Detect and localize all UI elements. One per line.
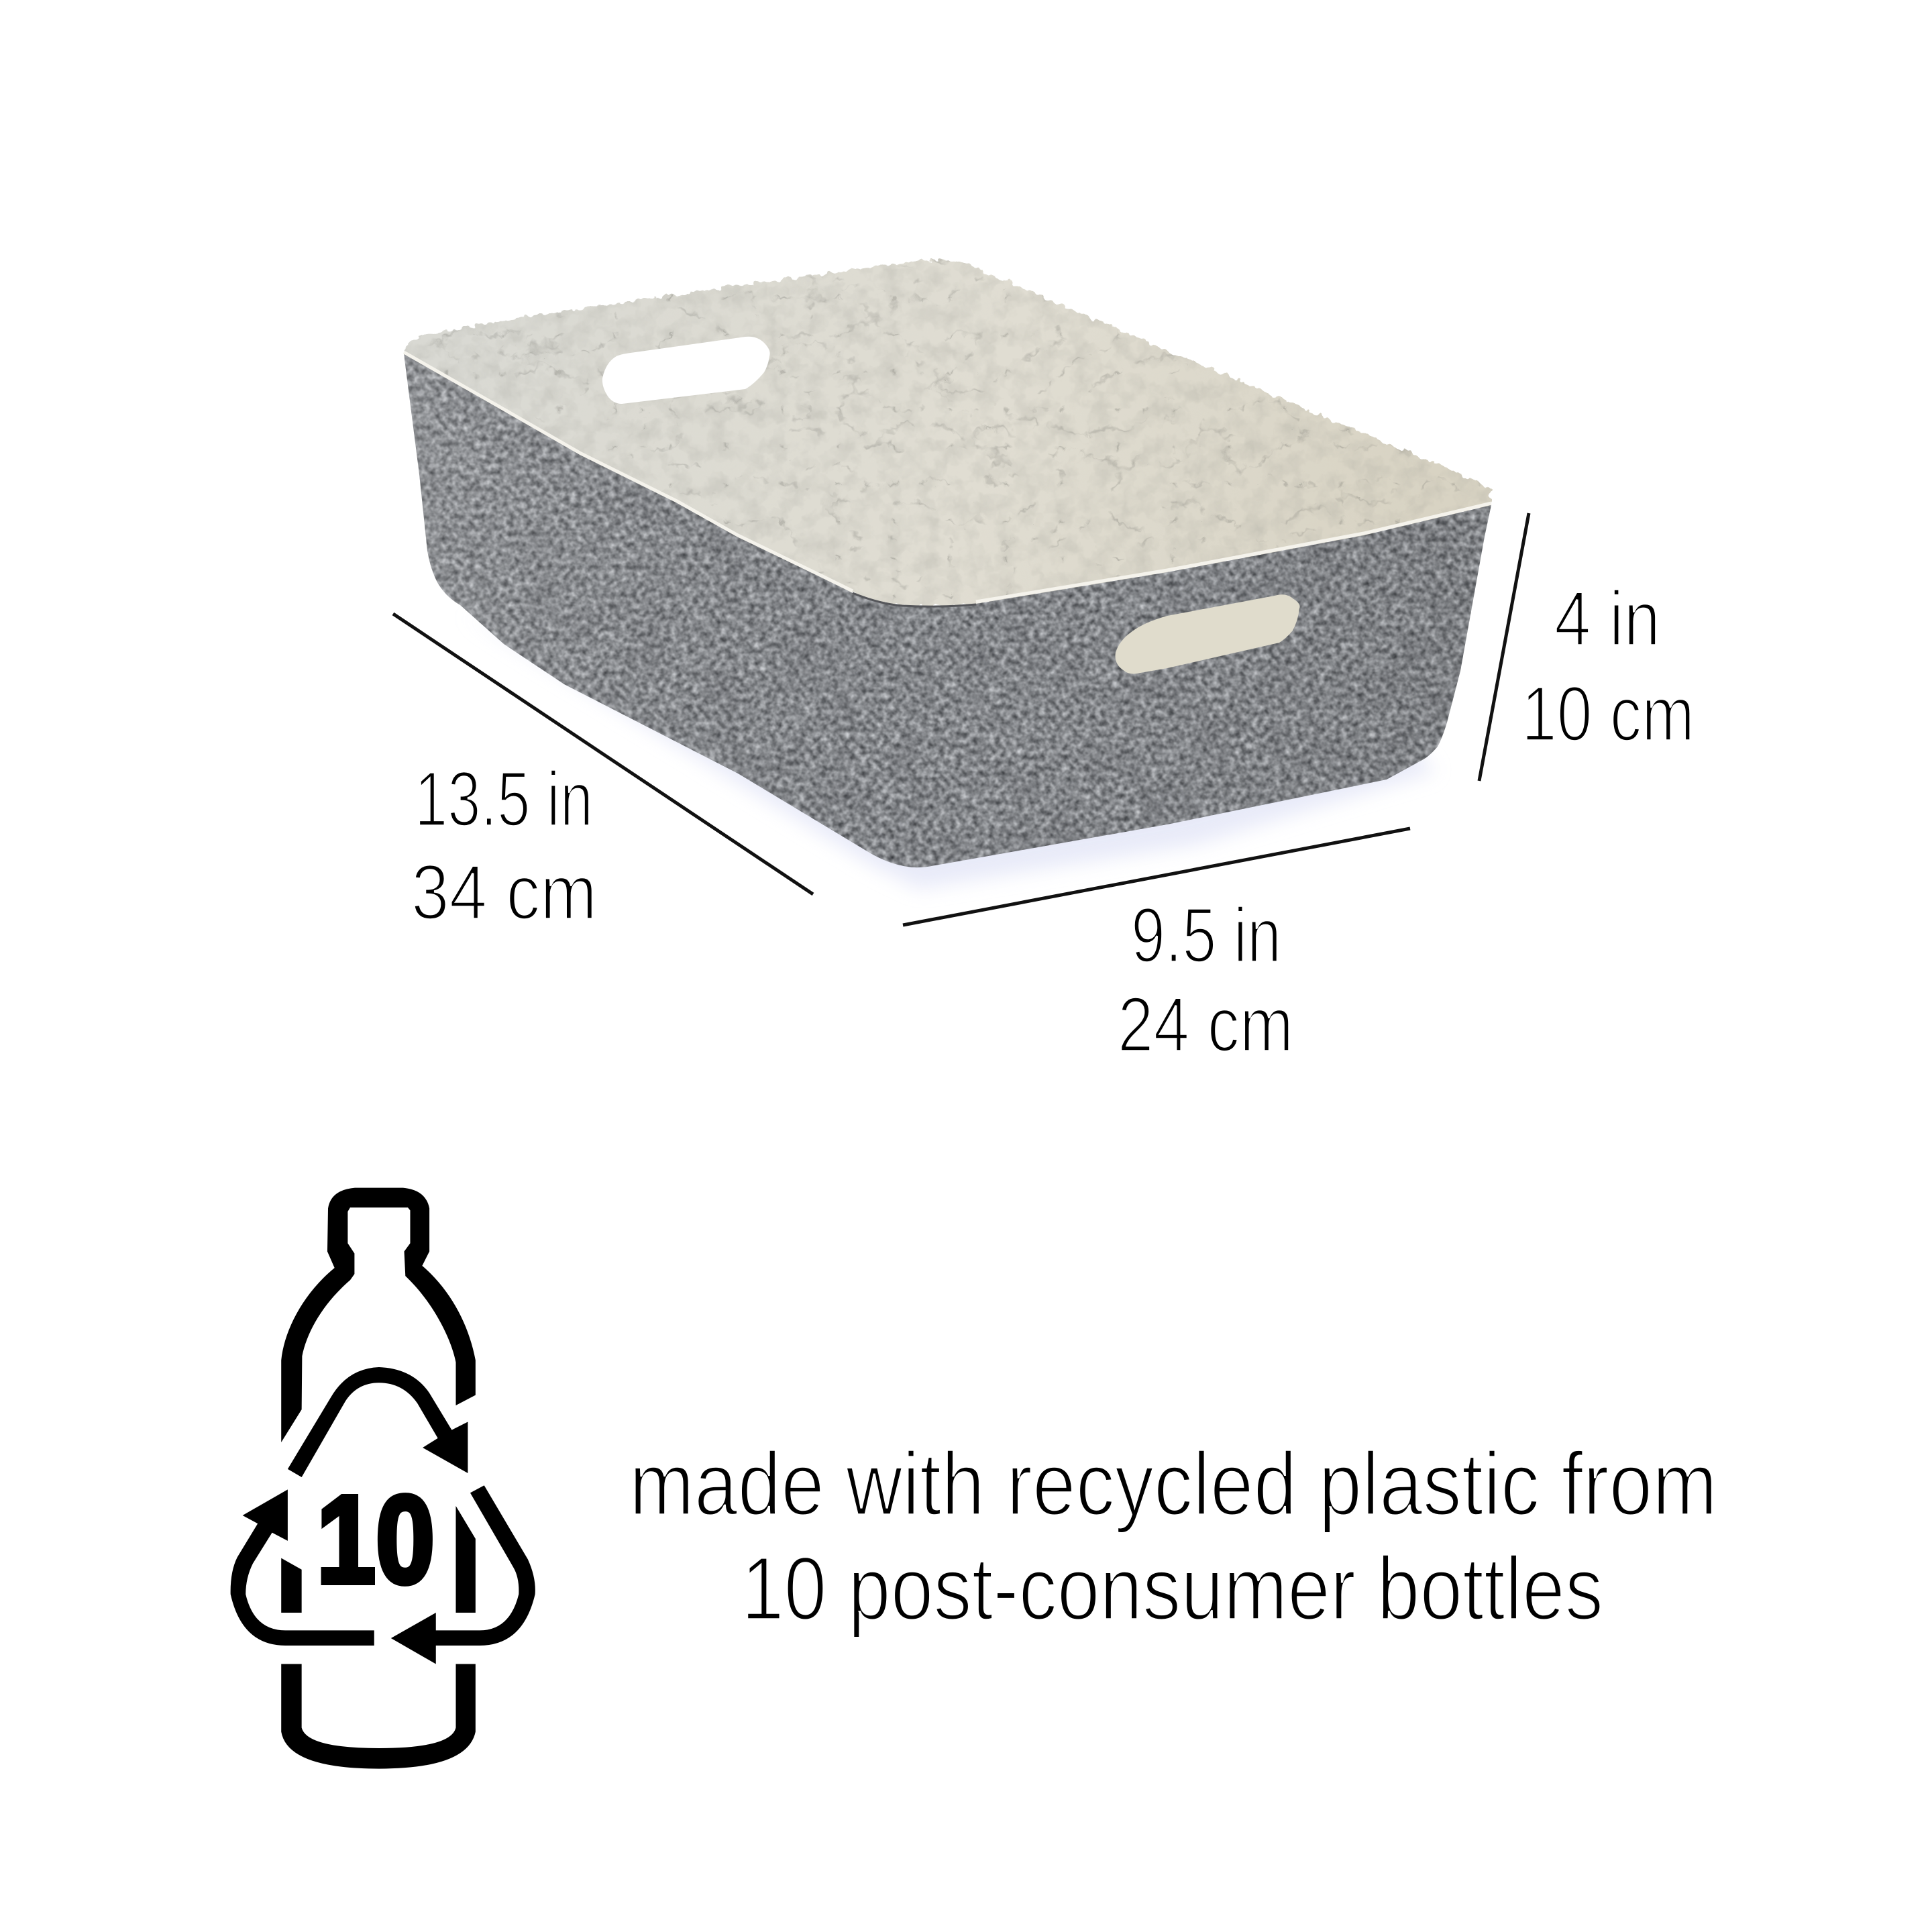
dimension line: length xyxy=(393,614,813,894)
recycled plastic statement xyxy=(629,1434,1717,1639)
recycled plastic statement: 10 post-consumer bottles xyxy=(741,1539,1603,1639)
bottle side fragment: right xyxy=(455,1506,476,1613)
infographic canvas xyxy=(231,258,1711,1769)
length label xyxy=(411,755,597,936)
icon: recycled bottle xyxy=(231,1188,535,1769)
front handle cutout xyxy=(1116,594,1300,674)
width label xyxy=(1118,892,1293,1068)
height label: 10 cm xyxy=(1521,670,1695,757)
bottle count number: 10 xyxy=(317,1470,435,1609)
basket exterior: grey felt xyxy=(396,349,1509,879)
bottle upper outline xyxy=(281,1188,476,1442)
basket photo xyxy=(396,255,1509,889)
basket rim edge xyxy=(404,352,853,591)
recycled plastic statement: made with recycled plastic from xyxy=(629,1434,1717,1534)
recycling arrow: right xyxy=(391,1485,535,1664)
basket interior: cream felt xyxy=(396,255,1509,617)
height label: 4 in xyxy=(1554,575,1660,662)
recycling arrow: left xyxy=(231,1489,374,1646)
bottle side fragment: left xyxy=(281,1558,302,1613)
length label: 34 cm xyxy=(411,849,597,936)
height label xyxy=(1521,575,1695,757)
dimension line: height xyxy=(1479,513,1529,781)
basket floor shadow xyxy=(463,614,1436,889)
basket rim right edge xyxy=(976,503,1491,602)
basket rim shaded corner xyxy=(853,593,976,606)
length label: 13.5 in xyxy=(415,755,593,843)
width label: 24 cm xyxy=(1118,981,1293,1068)
bottle base xyxy=(281,1664,476,1769)
width label: 9.5 in xyxy=(1131,892,1281,979)
dimension line: width xyxy=(903,828,1410,925)
back handle cutout xyxy=(602,337,770,404)
recycling arrow: top xyxy=(288,1367,468,1477)
